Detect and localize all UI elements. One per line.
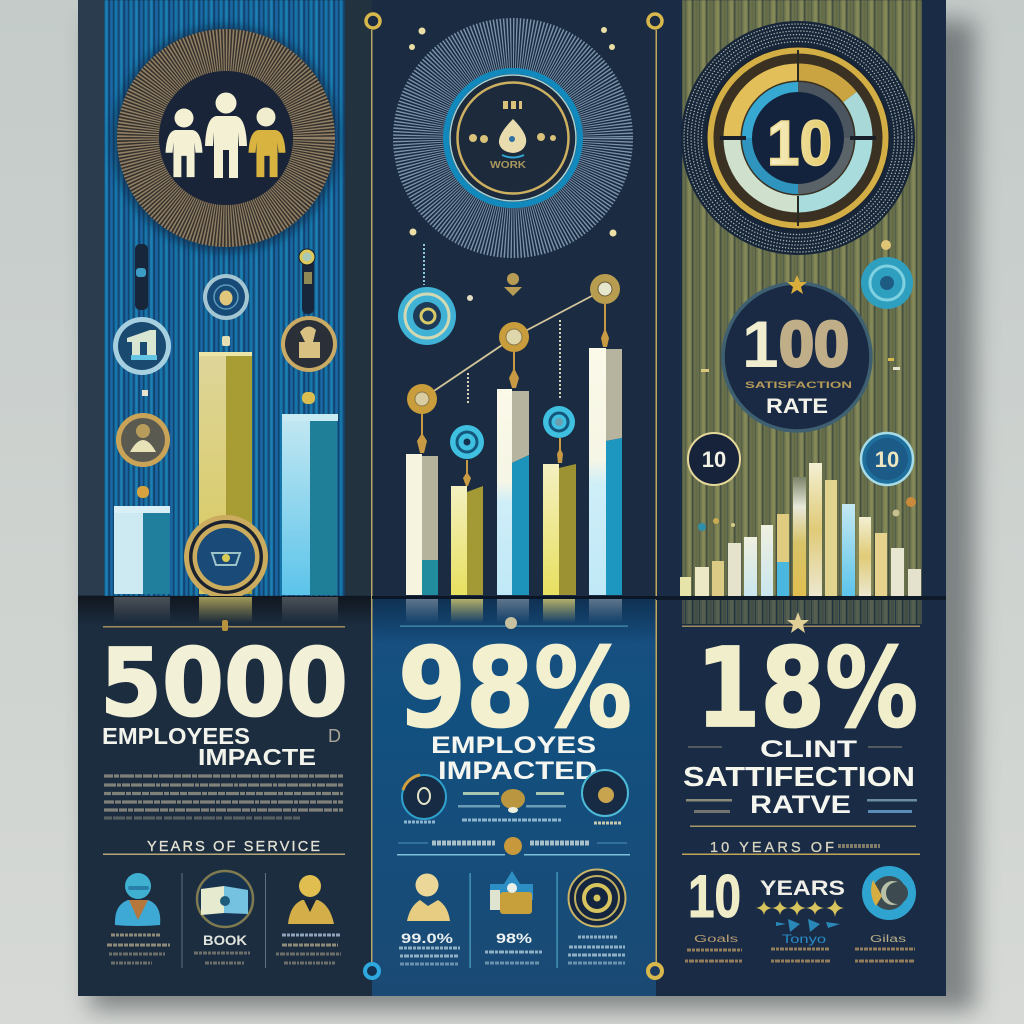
icon: large gold ring — [184, 515, 268, 599]
node pegs — [417, 304, 609, 486]
striped blue backdrop — [104, 0, 345, 596]
rule — [690, 826, 916, 827]
icon: top ring — [203, 274, 249, 320]
caption placeholders — [399, 937, 625, 964]
panel: satisfaction percent — [365, 14, 662, 996]
icon: ten-year dial — [681, 21, 915, 255]
striped olive backdrop — [682, 0, 922, 596]
bar: centre gold — [199, 352, 252, 594]
icon: gold target — [568, 870, 626, 926]
icon: person right — [249, 130, 285, 177]
heading trailing smudge — [838, 844, 880, 848]
label: employees: EMPLOYEES — [102, 723, 250, 749]
dividers — [182, 873, 266, 968]
badge: satisfaction rate — [723, 275, 871, 431]
caption: left: Goals — [694, 934, 738, 945]
icon: centre medal with lines — [458, 789, 566, 820]
small gold pieces — [137, 336, 315, 498]
badge: 10 right — [861, 433, 913, 485]
icon: gold person — [407, 874, 450, 921]
icon: radial dial badge — [419, 44, 607, 232]
sparkle dots — [409, 27, 616, 236]
icon: person centre — [205, 116, 247, 178]
icon: star folder — [490, 871, 533, 914]
icon: blue ring — [867, 871, 911, 915]
gold side rails — [365, 14, 662, 978]
dotted stems — [424, 244, 560, 403]
lower blue background — [372, 596, 656, 996]
paragraph placeholder — [104, 776, 343, 818]
badge: 10 left: 10 — [702, 447, 726, 472]
label: impacted: IMPACTED — [438, 757, 597, 785]
sub-heading with coin — [398, 837, 627, 855]
label: client: CLINT — [760, 736, 857, 763]
badge number: overlapping zeros: 00 — [779, 308, 849, 380]
caption placeholders — [107, 935, 341, 963]
caption: centre value: 98% — [496, 930, 533, 946]
icon: person ring — [116, 413, 170, 467]
icon: ten-year dial: 10 — [767, 107, 832, 179]
rule — [397, 854, 630, 856]
rule with star — [682, 612, 920, 633]
rating stars — [756, 899, 844, 917]
badge: 10 left — [688, 433, 740, 485]
icon: star — [787, 275, 807, 294]
icon: gold node right — [590, 274, 620, 304]
floor reflections — [372, 596, 656, 623]
icon: gold person — [288, 875, 334, 924]
icon: blue target small right — [543, 406, 575, 438]
badge word: rate: RATE — [766, 395, 828, 418]
bar: 4 — [543, 464, 576, 595]
panel: employees impacted — [78, 0, 372, 968]
icon: person left — [166, 130, 202, 177]
label: employes: EMPLOYES — [431, 732, 596, 759]
icon: radial people badge — [112, 25, 340, 253]
caption: book: BOOK — [203, 932, 247, 948]
caption: left value: 99.0% — [401, 930, 454, 946]
stat: years: YEARS — [760, 877, 845, 900]
decorative pillars — [135, 244, 315, 314]
scattered sparkles — [698, 358, 916, 531]
caption placeholders — [685, 949, 915, 961]
badge number: 1: 1 — [742, 307, 779, 381]
rule — [103, 854, 345, 855]
panel: client satisfaction — [656, 0, 946, 961]
label: impacted: IMPACTE — [198, 744, 316, 770]
rule with ornament — [400, 617, 628, 629]
label: faded letter: D — [328, 726, 341, 746]
icon: gold node centre — [499, 322, 529, 352]
bar: 1 — [406, 454, 438, 595]
icon: right dial — [582, 770, 628, 816]
rule — [682, 854, 920, 855]
heading: years of service: YEARS OF SERVICE — [147, 839, 320, 855]
stat: 18%: 18% — [696, 624, 918, 752]
icon: blue swirl — [861, 257, 913, 309]
bar: right blue — [282, 414, 338, 595]
icon: building ring — [113, 317, 171, 375]
label: rate: RATVE — [750, 791, 851, 819]
heading: 10 years of: 10 YEARS OF — [710, 840, 834, 856]
stat: 98%: 98% — [398, 624, 632, 752]
caption: right: Gilas — [870, 934, 906, 945]
badge: 10 right: 10 — [875, 447, 899, 472]
icon: gold node left — [407, 384, 437, 414]
dividers — [470, 872, 558, 968]
label: satisfaction: SATTIFECTION — [683, 761, 915, 792]
bar chart: fifteen bars — [680, 463, 921, 596]
bar: left blue — [114, 506, 170, 594]
trend line — [422, 289, 605, 399]
rule with ornament — [103, 620, 345, 631]
bar: 2 — [451, 486, 483, 595]
caption: centre: Tonyo — [782, 932, 826, 946]
icon: blue person — [115, 873, 160, 926]
stat: 5000: 5000 — [100, 629, 348, 738]
icon: blue target small — [450, 425, 484, 459]
icon: fist ring — [281, 316, 337, 372]
icon: book badge — [197, 871, 253, 927]
stat: 10: 10 — [688, 863, 741, 930]
badge caption: SATISFACTION — [745, 380, 852, 391]
icon: left dial — [402, 775, 446, 819]
bar: 5 — [589, 348, 622, 595]
blue chevrons — [776, 919, 840, 932]
small ornaments — [467, 273, 522, 301]
caption placeholders — [404, 822, 622, 823]
icon: blue target large — [398, 287, 456, 345]
floor reflections — [656, 596, 946, 624]
icon: radial dial badge: WORK — [490, 160, 527, 171]
small gold drop — [881, 240, 891, 250]
floor and reflections — [78, 596, 372, 626]
side marks — [686, 746, 917, 813]
bar: 3 — [497, 389, 529, 595]
